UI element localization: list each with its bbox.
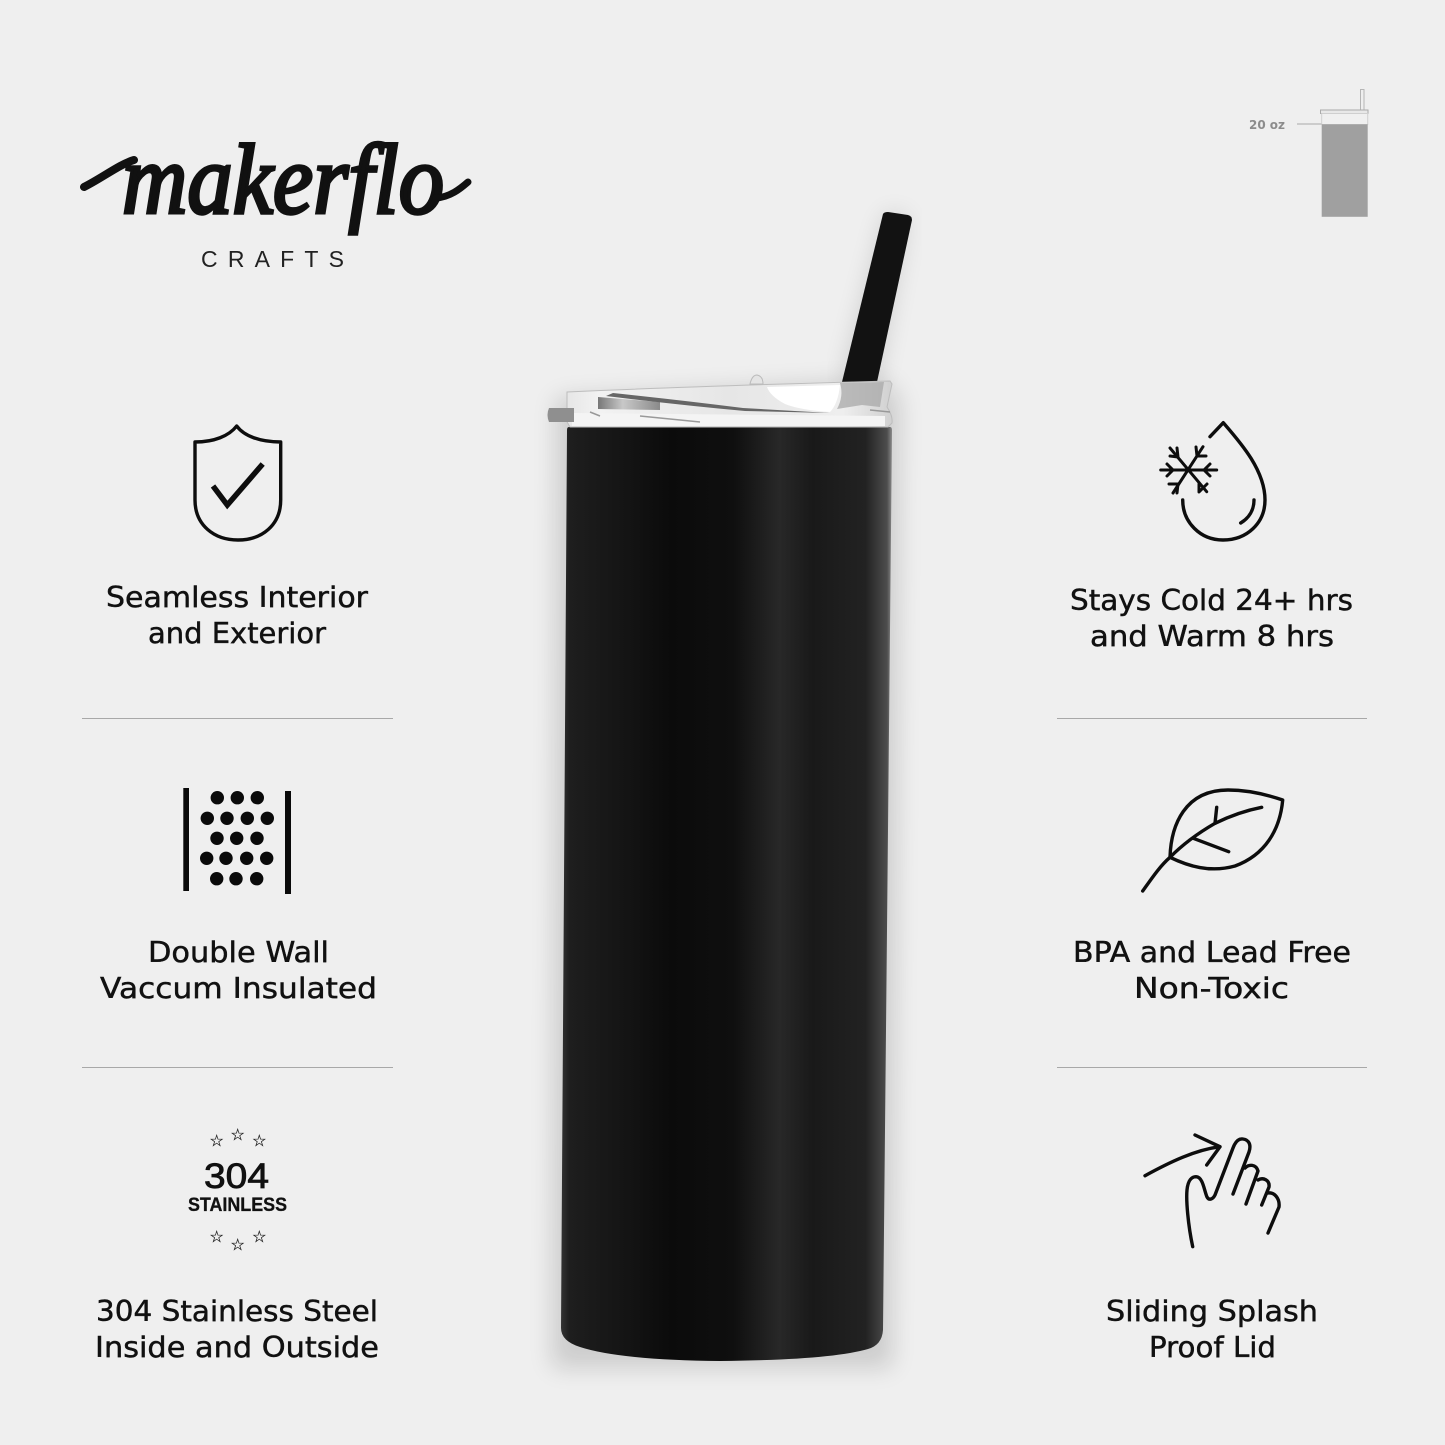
tumbler shadow — [552, 380, 900, 1368]
icon: 304 stainless badge: ☆ — [210, 1227, 224, 1246]
label: double wall — [100, 936, 377, 1005]
feature: 304 stainless steel — [95, 1125, 379, 1364]
icon: 304 stainless badge: ☆ — [231, 1235, 245, 1254]
icon: 304 stainless badge: ☆ — [210, 1131, 224, 1150]
label: sliding lid: Proof Lid — [1149, 1331, 1276, 1364]
icon: 304 stainless badge: ☆ — [252, 1227, 266, 1246]
icon: 304 stainless badge: STAINLESS — [188, 1195, 287, 1216]
icon: 304 stainless badge: ☆ — [231, 1125, 245, 1144]
tumbler body — [561, 427, 892, 1361]
logo: makerflo crafts: CRAFTS — [201, 246, 344, 272]
logo: makerflo crafts: makerflo — [122, 124, 444, 235]
icon: hand swipe arrow — [1145, 1135, 1279, 1247]
label: stays cold: and Warm 8 hrs — [1090, 620, 1334, 653]
label: sliding lid — [1106, 1295, 1318, 1364]
feature: double wall vacuum insulated — [100, 788, 377, 1005]
straw — [841, 212, 912, 384]
feature: seamless interior and exterior — [106, 426, 368, 650]
icon: double wall dots — [183, 788, 291, 894]
icon: 304 stainless badge: ☆ — [252, 1131, 266, 1150]
label: sliding lid: Sliding Splash — [1106, 1295, 1318, 1328]
label: double wall: Double Wall — [148, 936, 329, 969]
feature: bpa and lead free — [1073, 790, 1351, 1005]
label: bpa free: Non-Toxic — [1134, 972, 1289, 1005]
label: stays cold — [1070, 584, 1353, 653]
icon: water drop with snowflake — [1161, 423, 1265, 540]
icon: shield with check — [195, 426, 281, 540]
tumbler product photo — [548, 212, 912, 1368]
size diagram: 20 oz: 20 oz — [1249, 117, 1285, 132]
size diagram: 20 oz — [1249, 90, 1368, 217]
label: stays cold: Stays Cold 24+ hrs — [1070, 584, 1353, 617]
lid — [548, 375, 892, 427]
icon: 304 stainless badge: 304 — [204, 1157, 269, 1196]
label: double wall: Vaccum Insulated — [100, 972, 377, 1005]
label: 304 stainless: Inside and Outside — [95, 1331, 379, 1364]
label: bpa free: BPA and Lead Free — [1073, 936, 1351, 969]
feature: stays cold — [1070, 423, 1353, 653]
label: 304 stainless: 304 Stainless Steel — [96, 1295, 378, 1328]
icon: 304 stainless badge — [188, 1125, 287, 1254]
feature: sliding splash proof lid — [1106, 1135, 1318, 1364]
icon: leaf — [1143, 790, 1283, 891]
logo: makerflo crafts — [84, 124, 468, 272]
label: bpa free — [1073, 936, 1351, 1005]
label: seamless: Seamless Interior — [106, 581, 368, 614]
label: seamless — [106, 581, 368, 650]
label: 304 stainless — [95, 1295, 379, 1364]
label: seamless: and Exterior — [148, 617, 326, 650]
